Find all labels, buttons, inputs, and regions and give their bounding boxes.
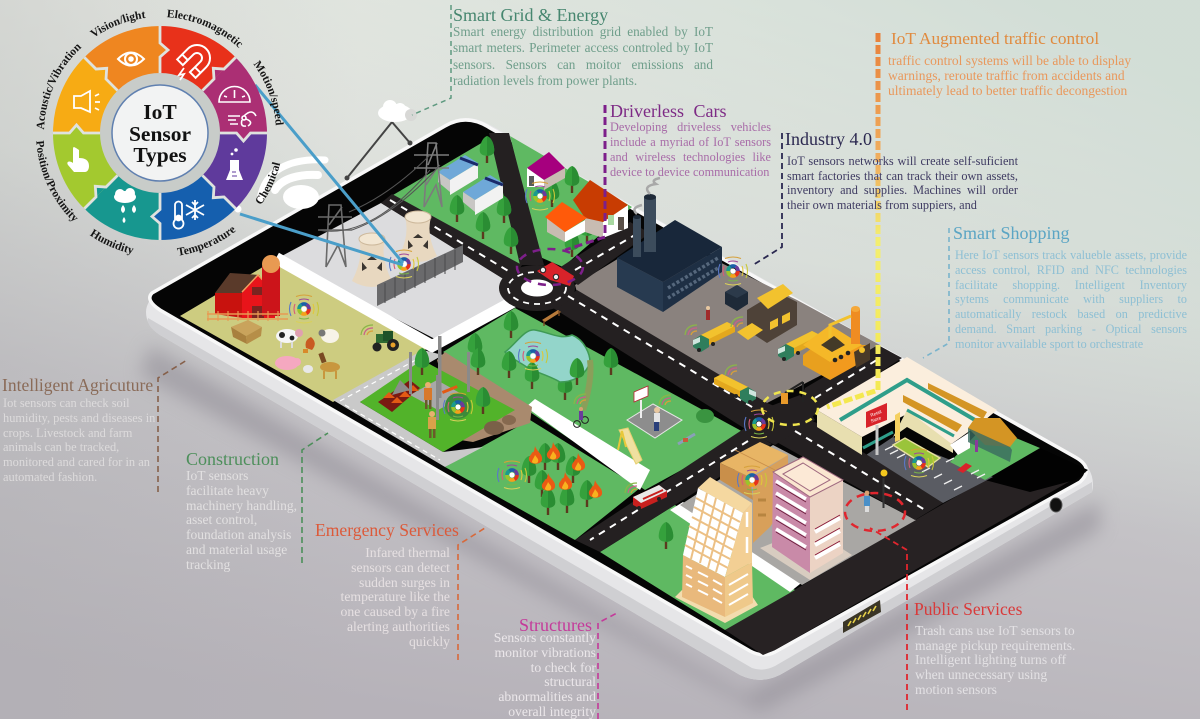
text: industry 4.0: inventory and supplies. Machines will order — [787, 183, 1018, 197]
sensors — [290, 182, 934, 494]
barn — [207, 255, 288, 321]
icon: thermometer and snowflake — [174, 200, 204, 229]
text: smart shopping: monitor avvailable sport to orchestrate — [955, 337, 1143, 351]
text: construction: IoT sensors — [186, 468, 248, 483]
text: construction: tracking — [186, 557, 230, 572]
tractor — [361, 325, 399, 352]
text: smart shopping: sytems communicate with suppliers to — [955, 292, 1187, 306]
text: construction: facilitate heavy — [186, 483, 269, 498]
wheel labels: Humidity — [90, 228, 134, 256]
bench — [542, 310, 561, 326]
text: smart grid and energy: sensors. Sensors can moitor emissions and — [453, 57, 713, 72]
text: traffic control: warnings, reroute traffic from accidents and — [888, 68, 1125, 83]
text: smart shopping: automatically restock based on predictive — [955, 307, 1187, 321]
cooling towers — [352, 211, 437, 287]
construction site — [378, 336, 516, 438]
text: driverless cars: and wireless technologies like — [610, 150, 771, 164]
text: emergency services: temperature like the — [341, 589, 450, 604]
roads — [381, 133, 943, 552]
bus stop — [968, 418, 1017, 462]
text: structures: to check for — [531, 660, 596, 675]
trees — [415, 136, 673, 549]
pink building — [760, 457, 852, 580]
wheel labels — [36, 10, 284, 256]
storage box — [725, 285, 748, 311]
text: traffic control — [888, 29, 1132, 98]
text: public services: manage pickup requirements. — [915, 638, 1075, 653]
barns — [438, 155, 503, 215]
center hub — [112, 85, 208, 181]
text: intelligent agriculture: Iot sensors can check soil — [3, 396, 130, 410]
leader: emergency — [458, 528, 485, 660]
leader: smart grid — [412, 5, 451, 115]
farm ground — [180, 258, 430, 402]
wheel labels: Electromagnetic — [166, 10, 242, 48]
leader: driverless cars — [517, 105, 605, 285]
text: driverless cars: Driverless Cars — [610, 101, 726, 121]
leader: construction — [302, 433, 328, 563]
construction path — [437, 352, 532, 442]
roundabout — [508, 272, 566, 304]
text: structures: Sensors constantly — [494, 630, 596, 645]
icon: speaker — [74, 91, 100, 112]
sensor type wheel — [36, 10, 284, 256]
text: driverless cars: include a myriad of IoT sensors — [610, 135, 771, 149]
text: public services: motion sensors — [915, 682, 997, 697]
icon: eye — [118, 52, 144, 66]
hub title: Sensor — [129, 122, 192, 146]
wheel labels: Motion/speed — [253, 60, 284, 126]
text: structures: monitor vibrations — [494, 645, 596, 660]
text: smart grid and energy: Smart energy distribution grid enabled by IoT — [453, 24, 713, 39]
construction plot — [360, 360, 515, 452]
text: Intelligent Agricuture — [2, 375, 153, 395]
icon: rain cloud — [114, 188, 136, 223]
text: industry 4.0: IoT sensors networks will create self-suficient — [787, 154, 1018, 168]
wheel labels: Position/Proximity — [36, 140, 78, 222]
leader: structures — [598, 613, 617, 719]
retail sign: Store — [870, 415, 882, 424]
text: Industry 4.0 — [785, 129, 872, 149]
wifi symbol — [234, 160, 325, 212]
text: smart shopping: Here IoT sensors track valueble assets, provide — [955, 248, 1187, 262]
text: intelligent agriculture: crops. Livestock and farm — [3, 426, 132, 440]
power wires — [318, 155, 440, 231]
segment: electromagnetic — [160, 26, 236, 91]
leader: agriculture — [158, 360, 187, 492]
text: construction: asset control, — [186, 512, 257, 527]
sensor connection lines — [240, 85, 403, 265]
icon: magnet — [177, 40, 215, 80]
text: construction — [186, 449, 297, 572]
hay bale — [231, 320, 262, 344]
leader: public services — [845, 493, 907, 710]
text: intelligent agriculture: automated fashion. — [3, 470, 97, 484]
text: emergency services: alerting authorities — [347, 619, 450, 634]
text: industry 4.0: smart factories that can track their own assets, — [787, 169, 1018, 183]
charging port — [843, 600, 881, 633]
text: industry 4.0 — [785, 129, 1018, 212]
text: Construction — [186, 449, 279, 469]
text: traffic control: traffic control systems will be able to display — [888, 53, 1131, 68]
pedestrian — [864, 491, 870, 512]
text: smart grid and energy: radiation levels from power plants. — [453, 73, 637, 88]
text: public services: when unnecessary using — [915, 667, 1047, 682]
segment: acoustic — [53, 57, 118, 133]
parking lot and store grass — [863, 437, 993, 503]
cloud with wires — [344, 100, 417, 180]
text: emergency services: quickly — [409, 634, 450, 649]
text: industry 4.0: their own materials from suppiers, and — [787, 198, 977, 212]
big house — [545, 180, 628, 242]
hub title — [129, 100, 192, 167]
text: public services — [914, 599, 1075, 697]
text: traffic control: ultimately lead to better traffic decongestion — [888, 83, 1127, 98]
small house — [527, 152, 565, 190]
bush — [696, 409, 714, 423]
segment: position — [53, 133, 118, 209]
cyclist — [574, 394, 588, 427]
transmission tower north — [414, 143, 449, 207]
text: smart shopping — [953, 223, 1187, 351]
retail sign: Retail — [870, 409, 882, 418]
segment: vision — [84, 26, 160, 91]
factory — [617, 178, 722, 312]
text: intelligent agriculture: humidity, pests and diseases in — [3, 411, 155, 425]
pond — [502, 330, 591, 410]
back tan building — [720, 442, 788, 543]
grass zones — [393, 136, 795, 630]
text: smart grid and energy — [453, 5, 713, 88]
text: driverless cars: device to device communication — [610, 165, 769, 179]
text: intelligent agriculture: animals can be tracked, — [3, 440, 119, 454]
farm animals — [275, 329, 340, 379]
text: driverless cars: Developing driveless vehicles — [610, 120, 771, 134]
text: emergency services: Infared thermal — [365, 545, 450, 560]
text: intelligent agriculture: monitored and cared for in an — [3, 455, 150, 469]
text: structures: abnormalities and — [498, 689, 596, 704]
wheel labels: Chemical — [256, 162, 280, 204]
headphone jack — [1050, 498, 1062, 512]
text: intelligent agriculture — [2, 375, 155, 484]
retail store — [817, 357, 997, 455]
segment: humidity — [84, 175, 160, 240]
parking lot markings — [885, 438, 985, 490]
icon: pointing hand — [67, 147, 89, 172]
wheel labels: Acoustic/Vibration — [36, 44, 82, 130]
construction road — [333, 350, 483, 467]
warehouse — [737, 284, 797, 343]
factory lot — [575, 233, 880, 403]
city map — [180, 133, 1040, 630]
text: Structures — [519, 615, 592, 635]
leader: smart shopping — [923, 228, 949, 358]
text: Smart Shopping — [953, 223, 1070, 243]
power plant lot — [278, 203, 520, 340]
traffic light — [781, 382, 803, 404]
leader: traffic control — [762, 33, 878, 425]
plant perimeter wall — [377, 245, 463, 306]
text: emergency services — [315, 520, 459, 649]
hub title: IoT — [143, 100, 177, 124]
yellow plant machine — [803, 306, 870, 380]
text: public services: Trash cans use IoT sensors to — [915, 623, 1075, 638]
text: IoT Augmented traffic control — [891, 29, 1099, 48]
wheel labels: Temperature — [176, 227, 236, 256]
text: structures: overall integrity — [508, 704, 596, 719]
icon: flask — [226, 148, 243, 180]
text: smart shopping: demand. Smart parking - Optical sensors — [955, 322, 1187, 336]
trucks — [685, 306, 820, 404]
tan tower — [675, 477, 758, 623]
retail sign — [866, 403, 887, 455]
building lot — [680, 445, 916, 585]
text: emergency services: sudden surges in — [359, 575, 450, 590]
text: construction: and material usage — [186, 542, 287, 557]
text: structures — [494, 615, 596, 719]
white stripes — [276, 258, 520, 346]
text: emergency services: one caused by a fire — [341, 604, 450, 619]
leader: industry — [753, 133, 782, 265]
segment: temperature — [160, 175, 236, 240]
hub title: Types — [133, 143, 187, 167]
text: public services: Intelligent lighting turns off — [915, 652, 1066, 667]
text: smart grid and energy: smart meters. Perimeter access controled by IoT — [453, 40, 713, 55]
text: construction: foundation analysis — [186, 527, 291, 542]
text: Public Services — [914, 599, 1022, 619]
tablet device — [146, 118, 1093, 680]
fire truck — [625, 483, 667, 510]
street lamp — [880, 470, 888, 508]
playground slide and seesaw — [618, 428, 695, 464]
road markings — [390, 200, 925, 540]
basketball court — [627, 386, 682, 438]
wheel labels: Vision/light — [90, 11, 146, 36]
text: construction: machinery handling, — [186, 498, 297, 513]
text: smart shopping: facilitate shopping. Intelligent Inventory — [955, 278, 1187, 292]
text: emergency services: sensors can detect — [351, 560, 450, 575]
text: structures: structural — [544, 674, 596, 689]
text: smart grid and energy: Smart Grid & Energy — [453, 5, 608, 25]
segment: chemical — [202, 133, 267, 209]
segment: motion — [202, 57, 267, 133]
icon: gauge and fan — [219, 86, 256, 126]
text: Emergency Services — [315, 520, 459, 540]
fire trees and flames — [522, 442, 602, 515]
text: smart shopping: access control, RFID and NFC technologies — [955, 263, 1187, 277]
red car — [537, 262, 574, 286]
white stripe lower — [526, 399, 650, 490]
text: driverless cars — [610, 101, 771, 179]
tablet shadow — [140, 345, 1100, 712]
transmission tower west — [318, 205, 352, 267]
